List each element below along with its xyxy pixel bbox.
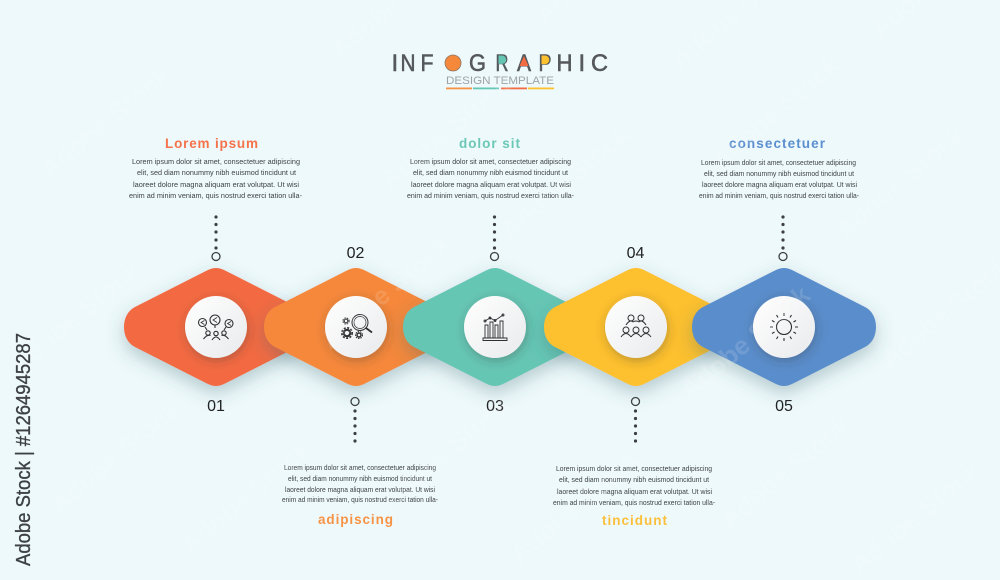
watermark pattern: Adobe Stock bbox=[5, 254, 146, 380]
title: C bbox=[591, 50, 608, 77]
panel: step 5 text bbox=[699, 136, 859, 200]
text block 1: Lorem ipsum dolor sit amet, consectetuer adipiscing bbox=[132, 157, 300, 166]
diamond step 4 bbox=[544, 268, 728, 386]
title: I bbox=[578, 50, 585, 77]
title P bowl bbox=[542, 56, 549, 64]
watermark pattern: Adobe Stock bbox=[175, 434, 316, 560]
watermark pattern: Adobe Stock bbox=[675, 279, 816, 405]
heading: Lorem ipsum: Lorem ipsum bbox=[165, 136, 258, 151]
circle 3 bbox=[464, 296, 526, 358]
panel: step 1 text bbox=[129, 136, 302, 200]
heading: dolor sit: dolor sit bbox=[459, 136, 520, 151]
text block 4: enim ad minim veniam, quis nostrud exerci tation ulla- bbox=[553, 498, 715, 507]
circle 2 bbox=[325, 296, 387, 358]
watermark pattern: Adobe Stock bbox=[505, 444, 646, 570]
text block 5: enim ad minim veniam, quis nostrud exerci tation ulla- bbox=[699, 191, 859, 200]
diamond step 3 bbox=[403, 268, 587, 386]
number 05: 05 bbox=[775, 398, 793, 415]
number 01: 01 bbox=[207, 398, 225, 415]
heading: tincidunt: tincidunt bbox=[602, 513, 668, 528]
text block 3: Lorem ipsum dolor sit amet, consectetuer adipiscing bbox=[410, 157, 571, 166]
text block 3: laoreet dolore magna aliquam erat volutpat. Ut wisi bbox=[411, 180, 571, 189]
text block 2: elit, sed diam nonummy nibh euismod tincidunt ut bbox=[288, 474, 432, 483]
title: H bbox=[556, 50, 572, 77]
title: P bbox=[538, 50, 552, 77]
number 02: 02 bbox=[347, 245, 364, 262]
text block 3: elit, sed diam nonummy nibh euismod tincidunt ut bbox=[413, 168, 568, 177]
stock credit: Adobe Stock | #1264945287 bbox=[13, 333, 35, 566]
text block 3 bbox=[407, 157, 574, 200]
title: I bbox=[392, 50, 398, 77]
icon: sun bbox=[770, 313, 798, 341]
circle 1 bbox=[185, 296, 247, 358]
connector: step 1 bbox=[212, 215, 220, 260]
watermark pattern: Adobe Stock bbox=[45, 394, 186, 520]
title: G bbox=[469, 50, 486, 77]
text block 2: Lorem ipsum dolor sit amet, consectetuer adipiscing bbox=[284, 463, 436, 472]
title: R bbox=[496, 50, 508, 77]
title letter O bbox=[445, 55, 461, 71]
watermark pattern: Adobe Stock bbox=[35, 59, 176, 185]
watermark pattern: Adobe Stock bbox=[495, 119, 636, 245]
text block 5 bbox=[699, 158, 859, 200]
watermark pattern: Adobe Stock bbox=[830, 119, 971, 245]
diamond step 2 bbox=[264, 268, 448, 386]
watermark pattern: Adobe Stock bbox=[375, 69, 516, 195]
panel: step 4 text bbox=[553, 464, 715, 528]
diamond step 1 bbox=[124, 268, 308, 386]
title: F bbox=[420, 50, 434, 77]
title R bowl bbox=[498, 56, 506, 64]
circle 5 bbox=[753, 296, 815, 358]
text block 2 bbox=[282, 463, 438, 504]
title A fill bbox=[520, 56, 528, 66]
text block 3: enim ad minim veniam, quis nostrud exerci tation ulla- bbox=[407, 191, 574, 200]
heading: adipiscing: adipiscing bbox=[318, 512, 393, 527]
text block 1: laoreet dolore magna aliquam erat volutpat. Ut wisi bbox=[133, 180, 299, 189]
circle 4 bbox=[605, 296, 667, 358]
text block 1: elit, sed diam nonummy nibh euismod tincidunt ut bbox=[137, 168, 297, 177]
text block 5: laoreet dolore magna aliquam erat volutpat. Ut wisi bbox=[702, 180, 857, 189]
watermark pattern: Adobe Stock bbox=[375, 389, 516, 515]
text block 1: enim ad minim veniam, quis nostrud exerci tation ulla- bbox=[129, 191, 302, 200]
title: A bbox=[517, 50, 531, 77]
connector: step 3 bbox=[490, 215, 498, 260]
text block 2: enim ad minim veniam, quis nostrud exerci tation ulla- bbox=[282, 495, 438, 504]
icon: people sharing bbox=[198, 315, 233, 340]
diamond step 5 bbox=[692, 268, 876, 386]
text block 1 bbox=[129, 157, 302, 200]
text block 4 bbox=[553, 464, 715, 507]
title: N bbox=[400, 50, 416, 77]
connector: step 5 bbox=[779, 215, 787, 260]
subtitle: DESIGN TEMPLATE bbox=[446, 75, 554, 87]
watermark pattern: Adobe Stock bbox=[715, 409, 856, 535]
panel: step 2 text bbox=[282, 463, 438, 527]
number 03: 03 bbox=[486, 398, 504, 415]
subtitle underline bbox=[446, 88, 554, 89]
watermark pattern: Adobe Stock bbox=[845, 454, 986, 580]
heading: consectetuer: consectetuer bbox=[729, 136, 826, 151]
connector: step 4 bbox=[632, 398, 640, 443]
icon: group of people bbox=[621, 315, 651, 337]
watermark pattern: Adobe Stock bbox=[315, 229, 456, 355]
number 04: 04 bbox=[627, 245, 644, 262]
text block 2: laoreet dolore magna aliquam erat volutpat. Ut wisi bbox=[285, 485, 435, 494]
text block 5: Lorem ipsum dolor sit amet, consectetuer adipiscing bbox=[701, 158, 856, 167]
icon: bar chart bbox=[483, 314, 507, 340]
watermark pattern: Adobe Stock bbox=[705, 49, 846, 175]
title bbox=[392, 50, 608, 77]
text block 4: laoreet dolore magna aliquam erat volutpat. Ut wisi bbox=[557, 487, 712, 496]
connector: step 2 bbox=[351, 398, 359, 443]
panel: step 3 text bbox=[407, 136, 574, 200]
icon: gears and magnifier bbox=[342, 314, 372, 338]
text block 4: Lorem ipsum dolor sit amet, consectetuer adipiscing bbox=[556, 464, 712, 473]
text block 4: elit, sed diam nonummy nibh euismod tincidunt ut bbox=[559, 475, 709, 484]
text block 5: elit, sed diam nonummy nibh euismod tincidunt ut bbox=[704, 169, 854, 178]
